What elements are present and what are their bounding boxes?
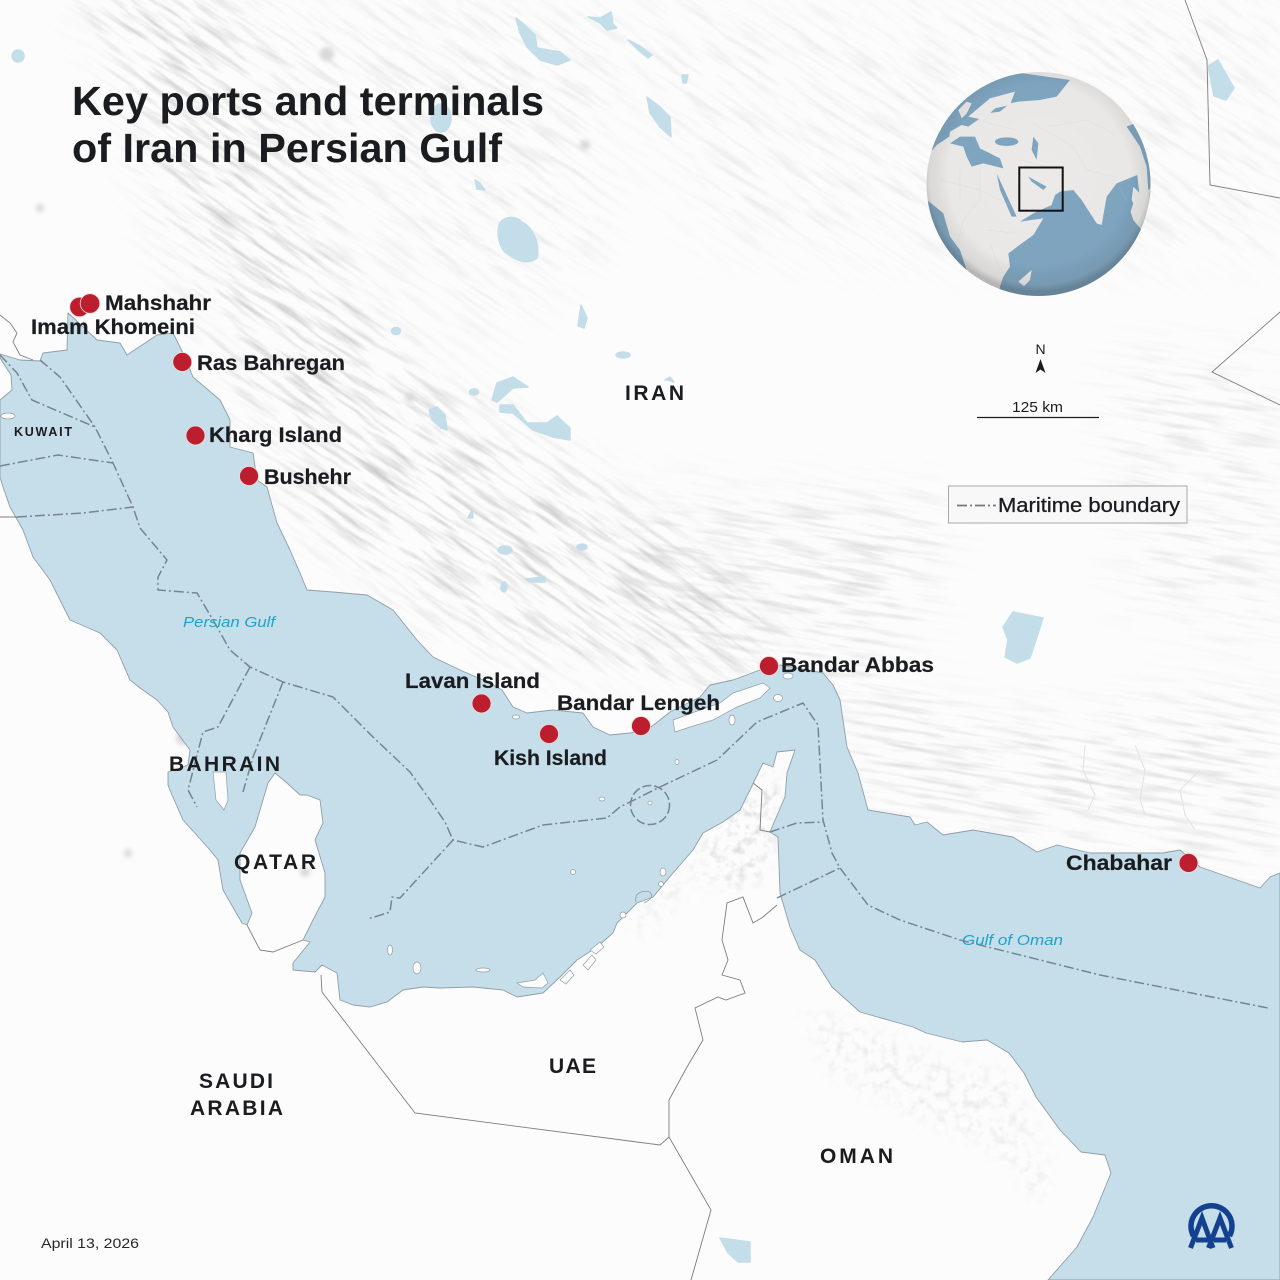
terrain: Oman and UAE mountains [641, 775, 1044, 1190]
globe oceans [928, 73, 1150, 296]
globe borders [940, 120, 1113, 270]
country labels: BAHRAIN [169, 753, 280, 776]
country labels: UAE [549, 1055, 596, 1078]
scale bar [977, 399, 1099, 418]
sea labels: Persian Gulf [183, 614, 277, 631]
globe locator map [926, 72, 1150, 296]
port labels: Mahshahr [105, 292, 211, 315]
urban areas [36, 47, 590, 877]
country labels: ARABIA [190, 1097, 283, 1120]
locator square [1019, 168, 1063, 211]
port labels: Kish Island [494, 747, 607, 770]
title [72, 78, 544, 171]
port labels: Ras Bahregan [197, 352, 345, 375]
port labels: Bandar Lengeh [557, 692, 720, 715]
coastal lagoon [636, 891, 652, 903]
sea labels: Gulf of Oman [962, 932, 1063, 949]
maritime boundaries [0, 355, 1268, 1008]
legend: maritime boundary: Maritime boundary [998, 495, 1180, 517]
north arrow [1035, 341, 1046, 373]
islands [1, 413, 793, 988]
legend: maritime boundary [948, 486, 1187, 523]
island: Sir Bani Yas [517, 973, 548, 988]
port labels: Lavan Island [405, 670, 540, 693]
port labels: Kharg Island [209, 424, 342, 447]
country labels [14, 382, 893, 1168]
country labels: KUWAIT [14, 425, 72, 439]
country labels: SAUDI [199, 1070, 273, 1093]
country labels: IRAN [625, 382, 684, 405]
port labels: Imam Khomeini [31, 316, 195, 339]
port labels: Bushehr [264, 466, 351, 489]
globe land details [958, 92, 1140, 286]
island: Bahrain [213, 772, 228, 810]
date: April 13, 2026 [41, 1235, 139, 1251]
title: of Iran in Persian Gulf [72, 125, 502, 171]
terrain: Zagros ridges [80, 0, 1280, 692]
scale bar: 125 km [1012, 399, 1063, 416]
terrain: southern Iran ridges [636, 366, 1280, 862]
rivers in Baluchistan [1083, 745, 1200, 830]
port labels: Bandar Abbas [781, 654, 934, 677]
port markers [70, 294, 1198, 872]
sea: Persian Gulf and Gulf of Oman [0, 313, 1280, 1280]
logo: AA [1190, 1206, 1232, 1248]
port labels: Chabahar [1066, 852, 1172, 875]
port labels [31, 292, 1172, 875]
country labels: QATAR [234, 851, 316, 874]
north arrow: N [1035, 341, 1046, 357]
sea labels [183, 614, 1063, 949]
island: Qeshm [673, 683, 770, 732]
country labels: OMAN [820, 1145, 893, 1168]
title: Key ports and terminals [72, 78, 544, 124]
